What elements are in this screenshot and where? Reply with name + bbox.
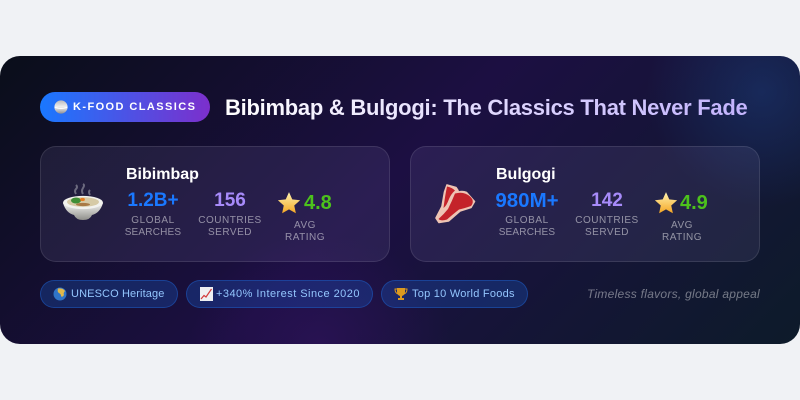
stat: global searches: GLOBAL xyxy=(131,215,175,226)
stat: average rating xyxy=(655,192,708,242)
stat: average rating: AVG xyxy=(671,220,693,231)
tag: UNESCO Heritage xyxy=(40,280,178,308)
stat: countries served: SERVED xyxy=(208,227,252,238)
stat: countries served: 142 xyxy=(591,190,623,211)
stat: average rating: 4.8 xyxy=(304,192,332,214)
icon: trending chart xyxy=(200,287,213,301)
stat: countries served xyxy=(198,190,262,238)
stat: global searches: SEARCHES xyxy=(125,227,181,238)
stat: global searches: 1.2B+ xyxy=(127,190,179,211)
icon: star xyxy=(655,192,677,214)
stat: countries served: COUNTRIES xyxy=(575,215,639,226)
stat: countries served: SERVED xyxy=(585,227,629,238)
stat: global searches: 980M+ xyxy=(495,189,559,212)
icon: rice bowl xyxy=(54,100,68,114)
stat: global searches xyxy=(125,190,181,238)
stat: average rating: 4.9 xyxy=(680,192,708,214)
card background xyxy=(0,56,800,344)
stat: average rating: AVG xyxy=(294,220,316,231)
tag label: +340% Interest Since 2020 xyxy=(216,288,360,300)
tag label: Top 10 World Foods xyxy=(412,288,515,300)
heading: Bibimbap: Bibimbap xyxy=(126,166,199,183)
stat: countries served xyxy=(575,190,639,238)
panel: Bulgogi xyxy=(410,146,760,262)
icon: trophy xyxy=(394,288,408,300)
icon: globe xyxy=(54,288,66,300)
heading: Bulgogi: Bulgogi xyxy=(496,166,556,183)
stat: global searches xyxy=(495,189,559,238)
icon: star xyxy=(278,192,300,214)
title: Bibimbap & Bulgogi: The Classics That Never Fade xyxy=(225,95,747,120)
icon: steaming bowl xyxy=(63,183,103,220)
stat: countries served: 156 xyxy=(214,190,246,211)
badge label: K-FOOD CLASSICS xyxy=(73,101,196,113)
badge: K-Food Classics xyxy=(40,92,210,122)
tagline: Timeless flavors, global appeal xyxy=(587,287,760,301)
tag: interest growth xyxy=(186,280,373,308)
icon: steak xyxy=(435,184,476,224)
stat: global searches: SEARCHES xyxy=(499,227,555,238)
panel: Bibimbap xyxy=(40,146,390,262)
stat: countries served: COUNTRIES xyxy=(198,215,262,226)
stat: average rating xyxy=(278,192,332,242)
stat: average rating: RATING xyxy=(662,232,702,242)
stat: global searches: GLOBAL xyxy=(505,215,549,226)
stat: average rating: RATING xyxy=(285,232,325,242)
tag: Top 10 World Foods xyxy=(381,280,528,308)
tag label: UNESCO Heritage xyxy=(71,288,164,300)
